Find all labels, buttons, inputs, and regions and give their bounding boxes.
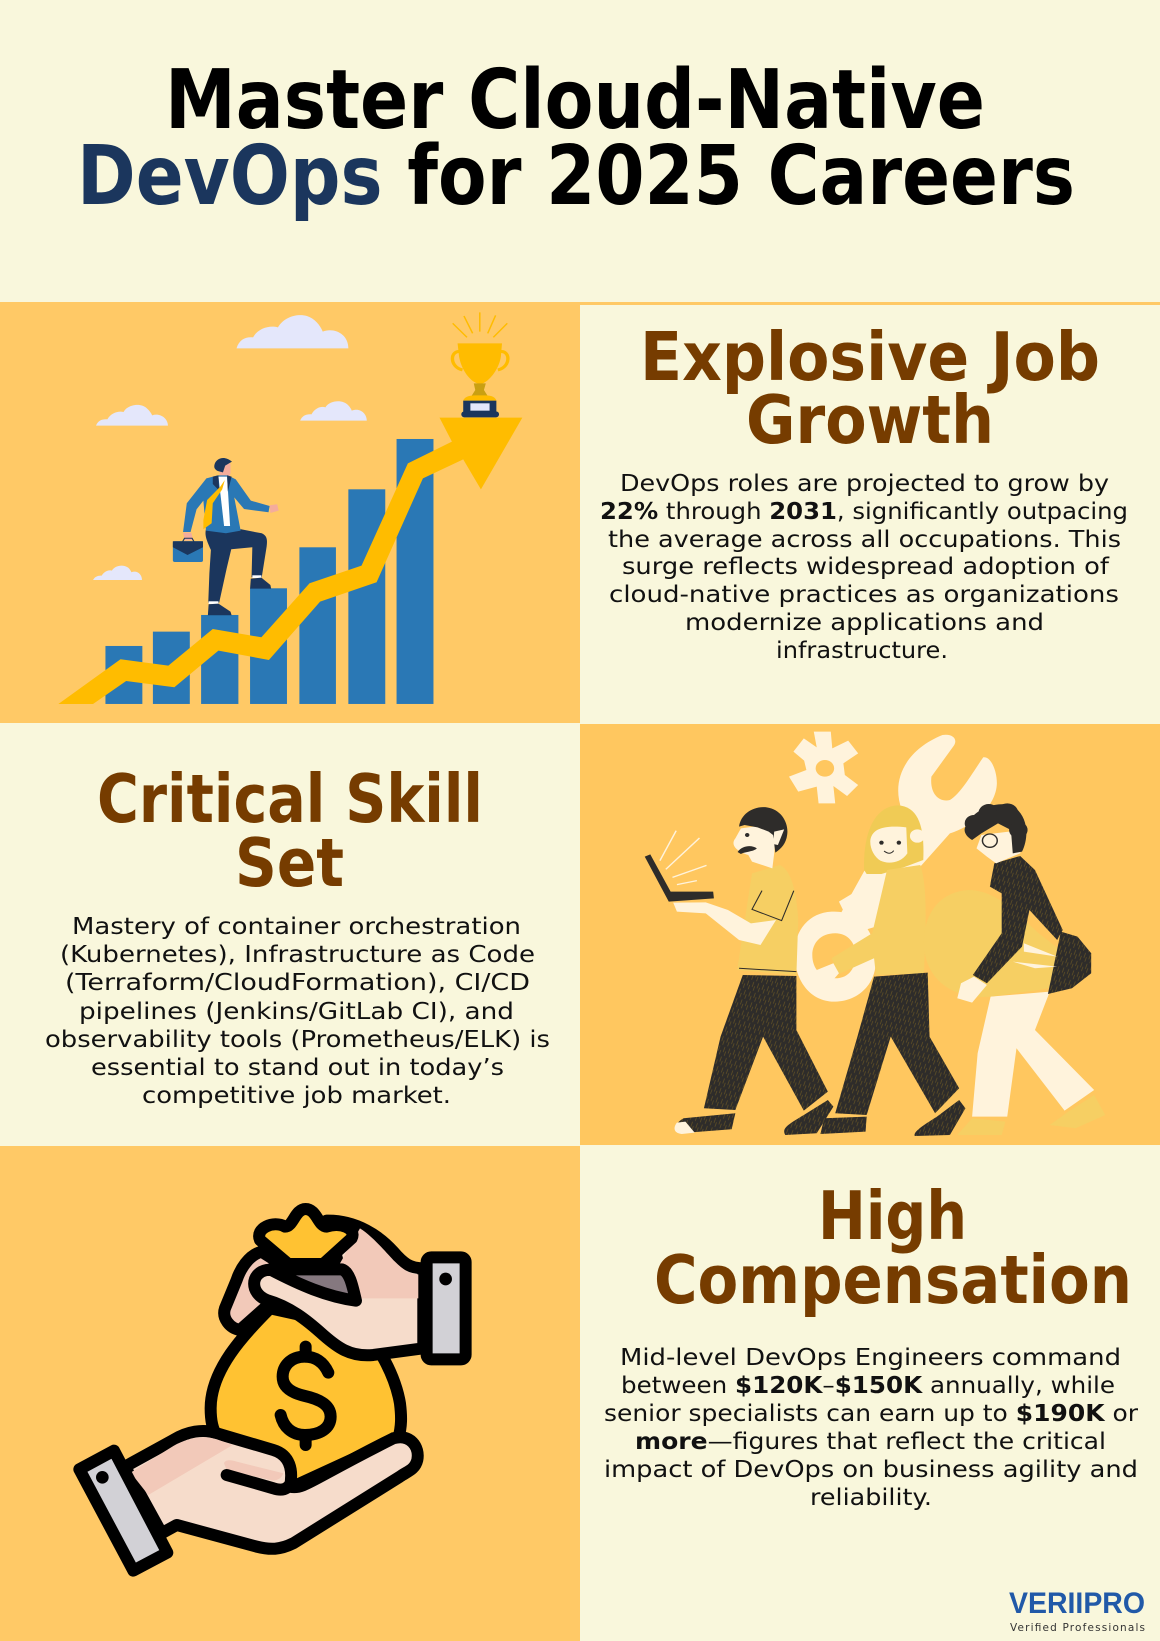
- text block: DevOps roles are projected to grow by: [620, 469, 1109, 497]
- icon: clouds: [93, 315, 367, 580]
- logo: VERIIPRO: Verified Professionals: [1010, 1622, 1145, 1634]
- icon: wrench: [795, 735, 997, 1002]
- text block: [45, 912, 550, 1109]
- icon: gear: [789, 732, 858, 803]
- text block: pipelines (Jenkins/GitLab CI), and: [79, 997, 514, 1025]
- text block: impact of DevOps on business agility and: [604, 1455, 1138, 1483]
- icon: person with wrench: [817, 805, 965, 1136]
- text block: essential to stand out in today’s: [91, 1053, 504, 1081]
- icon: person with lightbulb: [924, 803, 1105, 1135]
- heading: [654, 1177, 1132, 1319]
- icon: gripping fingers: [270, 1269, 356, 1301]
- icon: money bag: [211, 1308, 401, 1485]
- heading: Explosive Job: [640, 318, 1100, 396]
- heading: Critical Skill: [97, 760, 483, 838]
- heading: [97, 760, 483, 902]
- icon: businessman climbing: [173, 458, 279, 615]
- panel: growth illustration: [0, 303, 580, 723]
- bar chart: [105, 439, 433, 704]
- title: Master Cloud-Native: [165, 53, 985, 148]
- text block: 22% through 2031, significantly outpacing: [600, 497, 1128, 525]
- text block: cloud-native practices as organizations: [609, 580, 1119, 608]
- panel: team illustration: [580, 724, 1160, 1145]
- panel: explosive job growth: [600, 318, 1128, 664]
- text block: more—figures that reflect the critical: [635, 1427, 1106, 1455]
- heading: Set: [235, 824, 344, 902]
- text block: (Terraform/CloudFormation), CI/CD: [65, 968, 530, 996]
- text block: [604, 1343, 1138, 1511]
- text block: reliability.: [810, 1483, 932, 1511]
- icon: person with laptop: [645, 807, 833, 1135]
- icon: bag knot: [259, 1209, 353, 1264]
- text block: competitive job market.: [142, 1081, 451, 1109]
- panel: money illustration: [0, 1146, 580, 1641]
- heading: [640, 318, 1100, 459]
- panel: high compensation: [604, 1177, 1138, 1511]
- text block: senior specialists can earn up to $190K or: [604, 1399, 1138, 1427]
- title: DevOps for 2025 Careers: [77, 129, 1075, 224]
- text block: surge reflects widespread adoption of: [622, 552, 1110, 580]
- text block: the average across all occupations. This: [608, 525, 1121, 553]
- icon: trophy: [452, 312, 508, 417]
- text block: infrastructure.: [776, 636, 948, 664]
- text block: [600, 469, 1128, 664]
- text block: modernize applications and: [685, 608, 1044, 636]
- arrow: rising trend: [58, 418, 522, 704]
- logo: VERIIPRO: VERIIPRO: [1009, 1587, 1145, 1620]
- icon: hand behind bag: [224, 1252, 280, 1330]
- text block: (Kubernetes), Infrastructure as Code: [60, 940, 535, 968]
- heading: Growth: [746, 381, 994, 459]
- logo: VERIIPRO: [1009, 1587, 1145, 1634]
- icon: upper hand: [254, 1221, 423, 1355]
- icon: cuffs: [79, 1257, 466, 1571]
- icon: dollar sign: [281, 1347, 331, 1445]
- heading: High: [818, 1177, 967, 1255]
- text block: between $120K–$150K annually, while: [621, 1371, 1115, 1399]
- text block: observability tools (Prometheus/ELK) is: [45, 1025, 550, 1053]
- text block: Mastery of container orchestration: [72, 912, 521, 940]
- panel: critical skill set: [45, 760, 550, 1109]
- text block: Mid-level DevOps Engineers command: [620, 1343, 1121, 1371]
- icon: lower hand: [125, 1431, 418, 1549]
- title: [77, 53, 1075, 224]
